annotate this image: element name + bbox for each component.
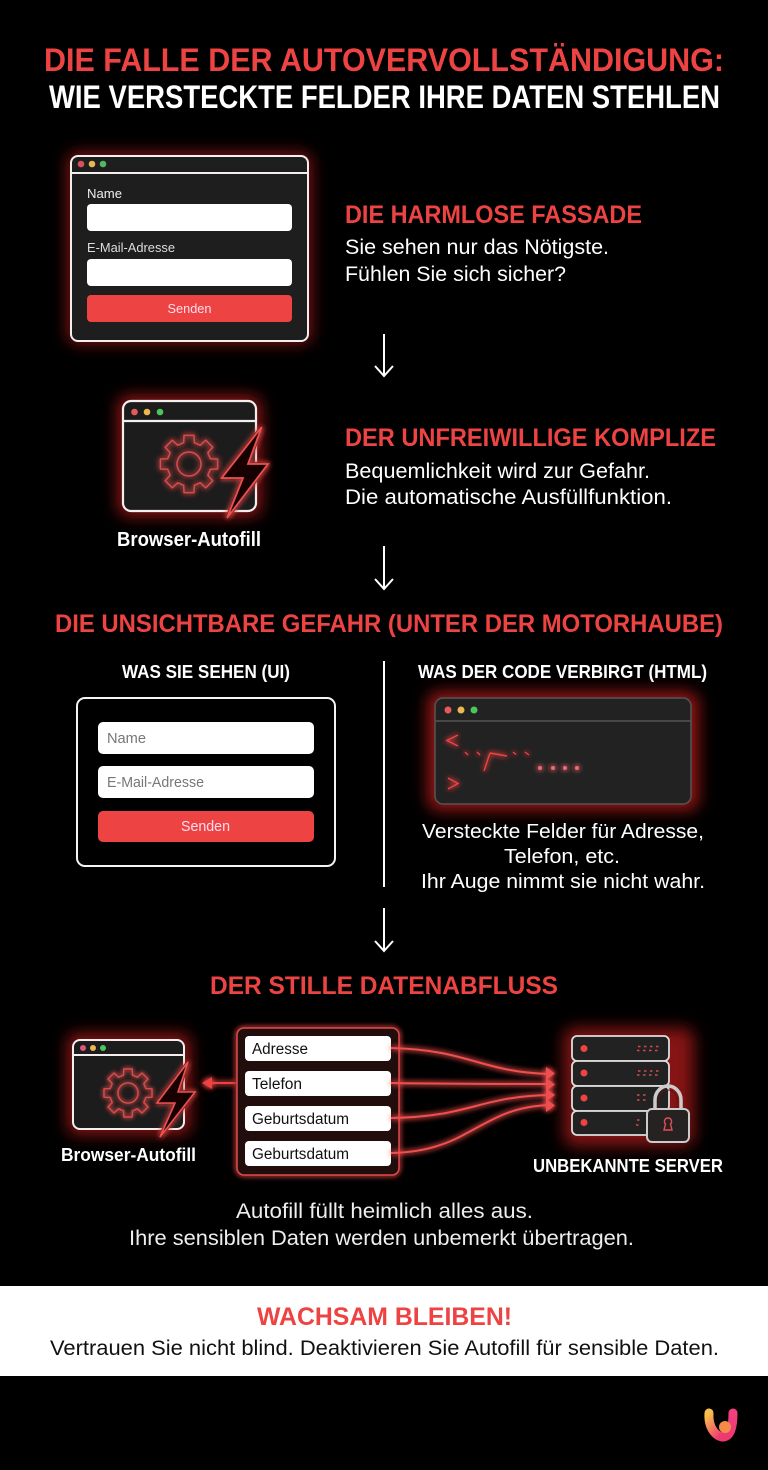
field: phone: Telefon bbox=[252, 1076, 302, 1093]
text block: hidden fields bbox=[421, 820, 705, 893]
panel: form window bbox=[68, 153, 311, 343]
field: address: Adresse bbox=[252, 1041, 308, 1058]
icon: server stack with lock bbox=[564, 1028, 694, 1146]
icon: lightning bolt bbox=[157, 1062, 195, 1137]
label: unknown servers: UNBEKANNTE SERVER bbox=[533, 1155, 723, 1176]
text block: harmless facade: DIE HARMLOSE FASSADE bbox=[345, 201, 642, 229]
icon: browser autofill bbox=[118, 396, 268, 518]
arrow 3 bbox=[375, 908, 393, 951]
text block: reluctant accomplice bbox=[345, 424, 716, 509]
text block: reluctant accomplice: Die automatische Ausfüllfunktion. bbox=[345, 486, 672, 509]
text block: reluctant accomplice: DER UNFREIWILLIGE KOMPLIZE bbox=[345, 424, 716, 452]
field label: name: Name bbox=[87, 186, 122, 201]
text: advice: Vertrauen Sie nicht blind. Deaktivieren Sie Autofill für sensible Daten. bbox=[50, 1336, 719, 1360]
arrow: fields to browser bbox=[202, 1077, 237, 1089]
placeholder: email: E-Mail-Adresse bbox=[107, 775, 204, 791]
field: birth date repeated: Geburtsdatum bbox=[252, 1146, 349, 1163]
arrow 2 bbox=[375, 546, 393, 589]
icon: gear bbox=[160, 435, 218, 493]
hidden code glyphs bbox=[447, 735, 579, 789]
text block: harmless facade bbox=[345, 201, 642, 286]
text block: data leak explanation: Ihre sensiblen Daten werden unbemerkt übertragen. bbox=[129, 1227, 634, 1250]
text block: hidden fields: Ihr Auge nimmt sie nicht wahr. bbox=[421, 870, 705, 893]
arrow 1 bbox=[375, 334, 393, 376]
panel: code window bbox=[428, 692, 698, 810]
arrows: data flow to server bbox=[391, 1048, 555, 1153]
text block: data leak explanation bbox=[129, 1200, 634, 1250]
icon: logo bbox=[709, 1413, 733, 1437]
icon: padlock bbox=[647, 1086, 689, 1142]
panel: call to action band bbox=[0, 1286, 768, 1376]
label: browser autofill small: Browser-Autofill bbox=[61, 1144, 196, 1165]
icon: lightning bolt bbox=[222, 427, 268, 518]
text block: harmless facade: Fühlen Sie sich sicher? bbox=[345, 263, 566, 286]
placeholder: name: Name bbox=[107, 731, 146, 747]
button label: Senden bbox=[168, 301, 212, 316]
subheading: what the code hides: WAS DER CODE VERBIRGT (HTML) bbox=[418, 661, 707, 682]
heading: stay alert: WACHSAM BLEIBEN! bbox=[257, 1303, 512, 1331]
panel: visible form bbox=[77, 698, 335, 866]
text block: hidden fields: Telefon, etc. bbox=[504, 845, 620, 868]
subheading: what you see: WAS SIE SEHEN (UI) bbox=[122, 661, 290, 682]
heading: invisible danger: DIE UNSICHTBARE GEFAHR (UNTER DER MOTORHAUBE) bbox=[55, 610, 723, 638]
label: browser autofill: Browser-Autofill bbox=[117, 529, 261, 551]
title: DIE FALLE DER AUTOVERVOLLSTÄNDIGUNG: bbox=[44, 42, 724, 78]
text block: hidden fields: Versteckte Felder für Adresse, bbox=[422, 820, 704, 843]
title bbox=[44, 42, 724, 115]
field label: email: E-Mail-Adresse bbox=[87, 240, 175, 255]
text block: data leak explanation: Autofill füllt heimlich alles aus. bbox=[236, 1200, 533, 1223]
icon: gear bbox=[104, 1069, 152, 1117]
button label: Senden bbox=[181, 819, 230, 835]
text block: harmless facade: Sie sehen nur das Nötigste. bbox=[345, 236, 609, 259]
icon: browser autofill small bbox=[68, 1034, 195, 1137]
text block: reluctant accomplice: Bequemlichkeit wird zur Gefahr. bbox=[345, 460, 650, 483]
field: birth date: Geburtsdatum bbox=[252, 1111, 349, 1128]
heading: silent data drain: DER STILLE DATENABFLUSS bbox=[210, 972, 558, 1000]
panel: hidden fields list bbox=[237, 1028, 399, 1175]
